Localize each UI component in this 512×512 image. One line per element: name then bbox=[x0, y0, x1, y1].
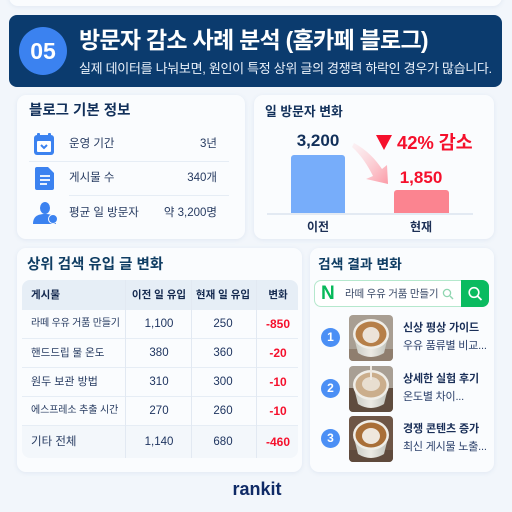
heading: blog basic info: 블로그 기본 정보 bbox=[29, 103, 130, 119]
arrow: decline bbox=[352, 143, 388, 184]
panel: search result change bbox=[310, 248, 494, 472]
bar: current bbox=[394, 190, 449, 214]
result description 2: 온도별 차이... bbox=[403, 391, 464, 403]
result 1 bbox=[321, 315, 487, 361]
row: espresso extraction time: 270 bbox=[149, 405, 169, 417]
row: bean storage method bbox=[31, 375, 287, 389]
row: average daily visitors: 평균 일 방문자 bbox=[69, 207, 139, 219]
row: post count: 340개 bbox=[187, 172, 217, 184]
row: latte milk foam: 250 bbox=[213, 318, 233, 330]
row: other total: 기타 전체 bbox=[31, 436, 77, 448]
icon: down triangle bbox=[376, 135, 392, 150]
heading: daily visitors change: 일 방문자 변화 bbox=[265, 104, 343, 119]
result 3 bbox=[321, 416, 487, 462]
row: bean storage method: 300 bbox=[213, 376, 233, 388]
step number badge: 05 bbox=[30, 38, 56, 64]
result title 1: 신상 평상 가이드 bbox=[403, 322, 479, 334]
subtitle: 실제 데이터를 나눠보면, 원인이 특정 상위 글의 경쟁력 하락인 경우가 많습니다. bbox=[79, 61, 492, 76]
row: espresso extraction time bbox=[31, 404, 287, 418]
result description 1: 우유 품류별 비교... bbox=[403, 340, 487, 352]
row: average daily visitors bbox=[69, 206, 217, 219]
title: 방문자 감소 사례 분석 (홈카페 블로그) bbox=[79, 27, 428, 53]
panel: top search inflow posts bbox=[17, 248, 302, 472]
label: current: 현재 bbox=[410, 220, 432, 234]
thumbnail: latte cup bbox=[349, 315, 393, 361]
result 2 bbox=[321, 366, 479, 412]
table header: 게시물 bbox=[31, 289, 60, 301]
number badge 2: 2 bbox=[327, 381, 334, 395]
number badge 1: 1 bbox=[327, 330, 334, 344]
thumbnail: milk pour cup bbox=[349, 366, 393, 412]
row: latte milk foam bbox=[31, 317, 290, 331]
icon: small magnifier bbox=[442, 288, 454, 300]
table header: 이전 일 유입 bbox=[132, 289, 186, 301]
bar: before bbox=[291, 155, 345, 214]
row: bean storage method: 원두 보관 방법 bbox=[31, 376, 98, 388]
logo: rankit: rankit bbox=[232, 479, 282, 499]
row: espresso extraction time: -10 bbox=[269, 404, 287, 418]
row: espresso extraction time: 에스프레소 추출 시간 bbox=[31, 405, 118, 416]
number badge 3 bbox=[321, 429, 340, 448]
icon: N logo: N bbox=[321, 283, 335, 304]
heading: search result change: 검색 결과 변화 bbox=[318, 257, 402, 272]
number badge 3: 3 bbox=[327, 431, 334, 445]
row: operating period: 운영 기간 bbox=[69, 138, 115, 150]
table header: 현재 일 유입 bbox=[196, 289, 250, 301]
row: latte milk foam: 1,100 bbox=[145, 318, 173, 330]
row: hand drip water temperature bbox=[31, 346, 287, 360]
number badge 2 bbox=[321, 379, 340, 398]
row: other total: -460 bbox=[266, 435, 290, 449]
search query: 라떼 우유 거품 만들기 bbox=[345, 288, 438, 300]
row: post count: 게시물 수 bbox=[69, 172, 115, 184]
result title 2: 상세한 실험 후기 bbox=[403, 373, 479, 385]
value: current: 1,850 bbox=[400, 168, 442, 187]
row: other total bbox=[22, 425, 298, 458]
row: bean storage method: 310 bbox=[149, 376, 169, 388]
value: before: 3,200 bbox=[297, 131, 339, 150]
row: operating period bbox=[69, 137, 217, 150]
table bbox=[22, 280, 298, 458]
row: post count bbox=[69, 171, 217, 184]
row: hand drip water temperature: 핸드드립 물 온도 bbox=[31, 347, 104, 359]
row: operating period: 3년 bbox=[200, 138, 217, 150]
result title 3: 경쟁 콘텐츠 증가 bbox=[403, 423, 479, 435]
row: average daily visitors: 약 3,200명 bbox=[164, 207, 217, 219]
row: hand drip water temperature: -20 bbox=[269, 346, 287, 360]
icon: document bbox=[35, 167, 54, 190]
panel: blog basic info bbox=[17, 95, 245, 239]
label: before: 이전 bbox=[307, 220, 329, 234]
number badge 1 bbox=[321, 328, 340, 347]
row: other total: 1,140 bbox=[145, 436, 173, 448]
row: espresso extraction time: 260 bbox=[213, 405, 233, 417]
search bar bbox=[314, 280, 489, 307]
icon: person bbox=[33, 202, 57, 224]
header banner bbox=[9, 15, 502, 87]
table header bbox=[22, 280, 298, 310]
thumbnail: latte art cup bbox=[349, 416, 393, 462]
row: latte milk foam: 라떼 우유 거품 만들기 bbox=[31, 318, 120, 329]
panel: daily visitors change bbox=[254, 95, 494, 239]
search button bbox=[461, 280, 489, 307]
row: hand drip water temperature: 360 bbox=[213, 347, 233, 359]
row: hand drip water temperature: 380 bbox=[149, 347, 169, 359]
row: other total: 680 bbox=[213, 436, 233, 448]
row: latte milk foam: -850 bbox=[266, 317, 290, 331]
top card sliver bbox=[9, 0, 502, 6]
result description 3: 최신 게시물 노출... bbox=[403, 441, 487, 453]
row: bean storage method: -10 bbox=[269, 375, 287, 389]
table header: 변화 bbox=[268, 289, 288, 301]
heading: top search inflow posts: 상위 검색 유입 글 변화 bbox=[27, 257, 163, 273]
icon: calendar bbox=[34, 133, 54, 155]
step number badge bbox=[19, 27, 67, 75]
callout: 42% decrease: 42% 감소 bbox=[397, 132, 473, 153]
